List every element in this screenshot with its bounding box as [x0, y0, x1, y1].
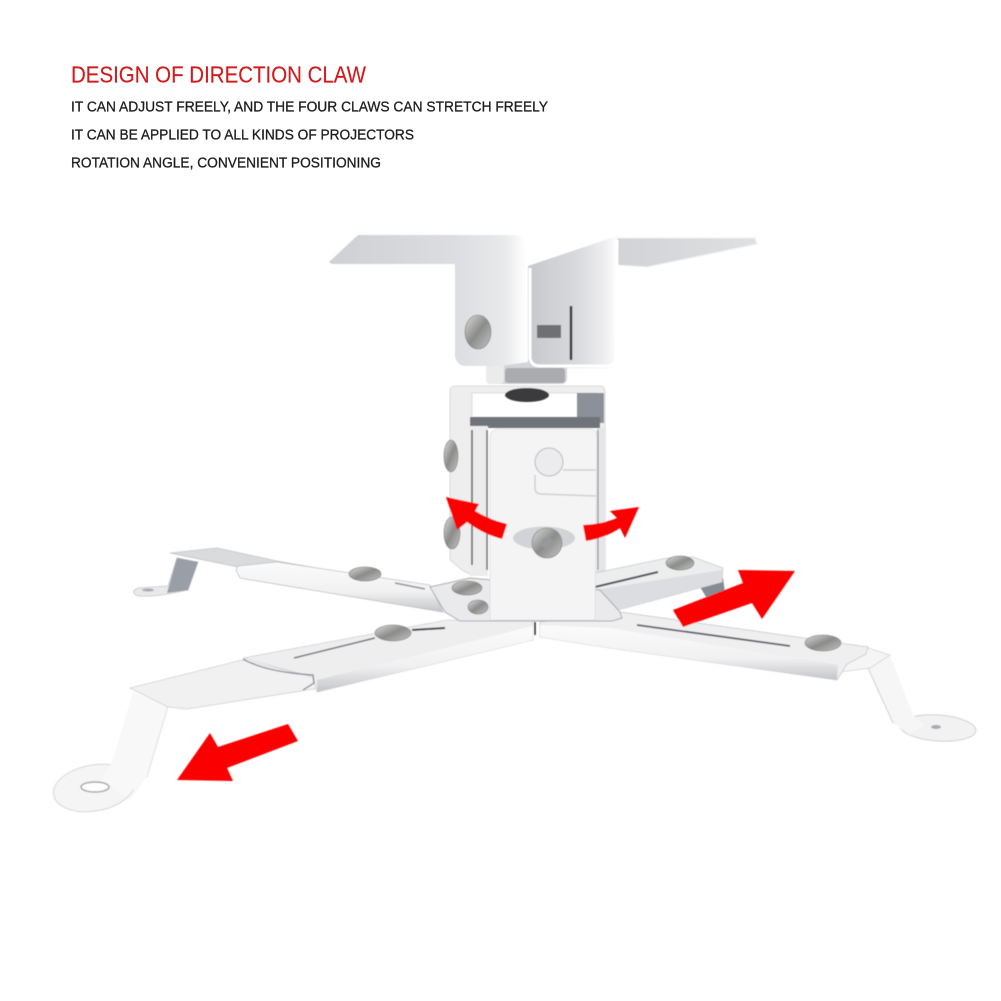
bottom screw: [505, 388, 549, 402]
adjustment notch: [535, 470, 596, 496]
arrow: rotate left: [446, 497, 507, 539]
left bolt: [465, 315, 491, 349]
peg: [535, 448, 563, 476]
tilt frame: [444, 386, 605, 576]
screw: [805, 635, 841, 651]
front sliding plate: [490, 428, 606, 620]
screw: [666, 556, 694, 570]
back-left arm: [134, 548, 443, 612]
inner back strip: [470, 417, 600, 428]
right wall: [528, 236, 618, 368]
heading: DESIGN OF DIRECTION CLAW: [71, 62, 366, 88]
side bolts: [444, 440, 458, 472]
projector mount illustration: [50, 235, 977, 818]
screw: [375, 625, 411, 641]
screw: [349, 567, 381, 581]
feature line 3: ROTATION ANGLE, CONVENIENT POSITIONING: [71, 156, 381, 172]
swivel nut: [487, 360, 567, 384]
feature line 2: IT CAN BE APPLIED TO ALL KINDS OF PROJECTORS: [71, 128, 414, 144]
wing nut: [532, 528, 562, 558]
outer frame: [450, 386, 605, 575]
slot: [513, 526, 575, 550]
front-left arm: [50, 620, 533, 818]
right plate: [617, 238, 757, 267]
text block: heading and feature lines: [71, 62, 548, 172]
arrow: outward back-right: [673, 570, 795, 627]
left plate and wall: [329, 235, 528, 366]
back-right arm: [595, 556, 725, 610]
feature line 1: IT CAN ADJUST FREELY, AND THE FOUR CLAWS CAN STRETCH FREELY: [71, 100, 548, 116]
arrow: rotate right: [583, 507, 639, 541]
plate screws: [452, 581, 482, 595]
left inner wall: [470, 426, 488, 576]
front-right arm: [540, 612, 977, 744]
top ceiling bracket: [329, 235, 757, 384]
central cross plate: [430, 578, 622, 635]
arrow: outward front-left: [177, 724, 298, 781]
